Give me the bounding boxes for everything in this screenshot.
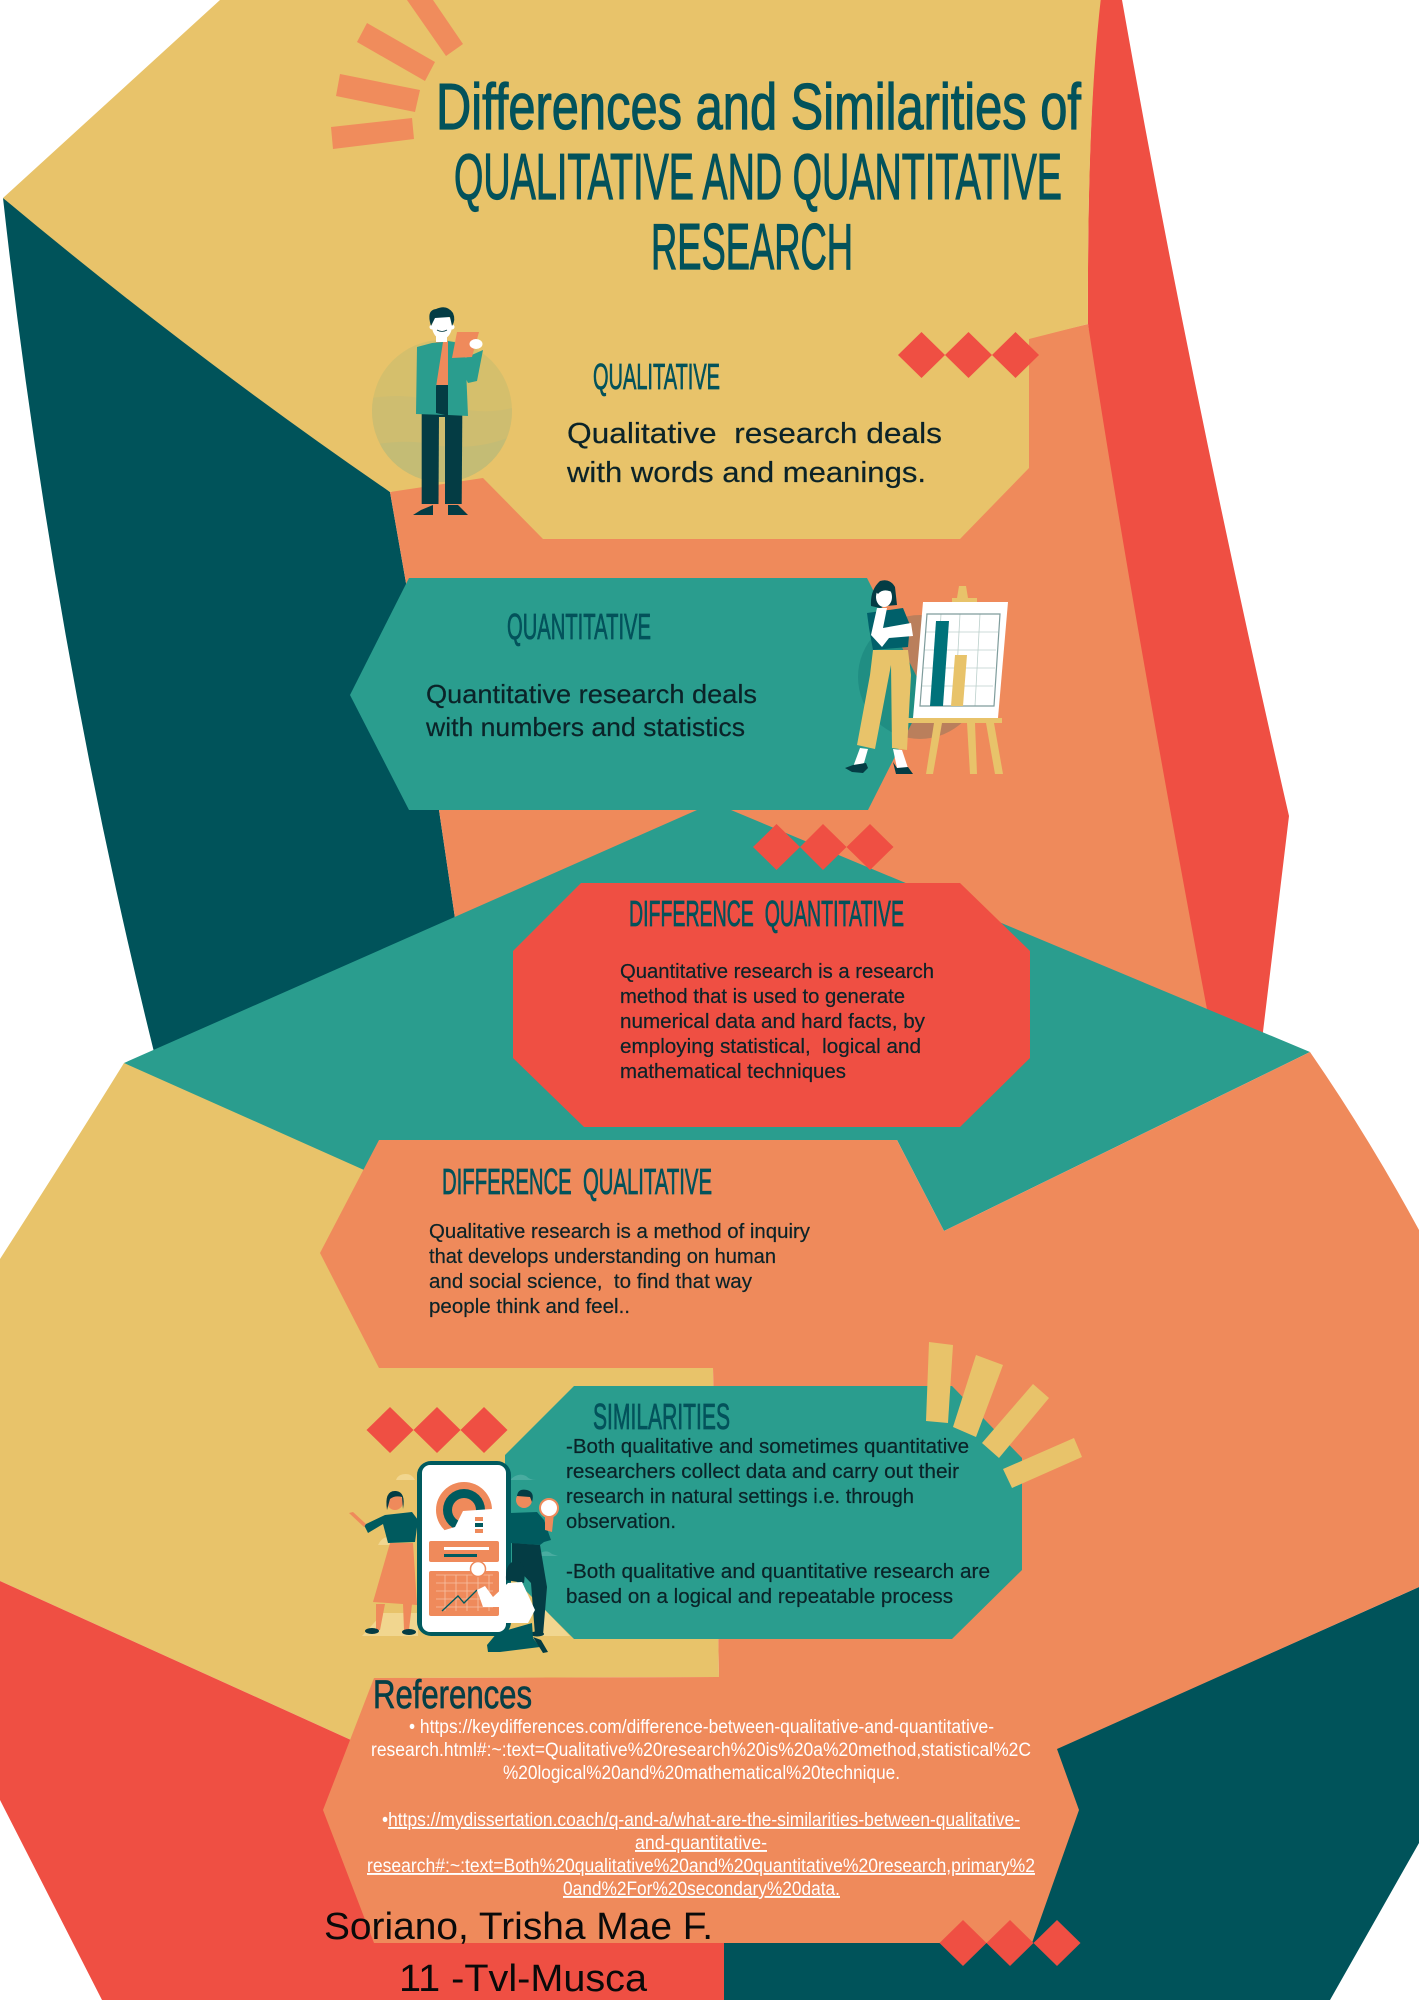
text: qualitative description: Qualitative research deals (567, 418, 942, 450)
text: difference qualitative description: Qualitative research is a method of inquiry (429, 1220, 811, 1243)
text: quantitative description: Quantitative research deals (426, 679, 757, 709)
text: reference list: research#:~:text=Both%20qualitative%20and%20quantitative%20research,primary%2 (367, 1856, 1035, 1877)
background shape: yellow lower left (0, 1063, 719, 1760)
decorative yellow rays by similarities (926, 1342, 1082, 1488)
text: difference qualitative description (429, 1220, 811, 1318)
text: similarities description: -Both qualitative and quantitative research are (566, 1561, 990, 1583)
background shape: dark teal left (3, 198, 456, 1052)
text: reference list: 0and%2For%20secondary%20data. (563, 1879, 840, 1900)
text: similarities description: research in natural settings i.e. through (566, 1486, 914, 1508)
text: similarities description: researchers collect data and carry out their (566, 1461, 959, 1483)
text: reference list: • https://keydifferences.com/difference-between-qualitative-and-quantitative- (409, 1717, 994, 1738)
diamonds: bottom right (940, 1920, 1080, 1966)
illustration: woman with bar chart on easel (845, 580, 1008, 774)
background shape: red bottom left (0, 1581, 724, 2000)
heading: qualitative: QUALITATIVE (593, 356, 720, 397)
title: Differences and Similarities of (436, 70, 1082, 143)
text: difference quantitative description: employing statistical, logical and (620, 1035, 921, 1058)
illustration: man reading tablet (372, 307, 512, 515)
panel: difference quantitative red octagon (513, 883, 1030, 1127)
text: similarities description: observation. (566, 1511, 676, 1533)
text: author name and class: Soriano, Trisha Mae F. (324, 1906, 713, 1948)
text: difference quantitative description: method that is used to generate (620, 985, 905, 1008)
background shape: large teal wedge (124, 810, 1310, 1231)
text: reference list: research.html#:~:text=Qualitative%20research%20is%20a%20method,statistical%2C (371, 1740, 1031, 1761)
heading: difference quantitative: DIFFERENCE QUANTITATIVE (629, 893, 904, 934)
background shape: red right (1088, 0, 1289, 1040)
text: similarities description (566, 1436, 990, 1608)
text: qualitative description (566, 418, 942, 489)
panel: similarities teal octagon (505, 1386, 1022, 1639)
text: similarities description: -Both qualitative and sometimes quantitative (566, 1436, 969, 1458)
illustration: people with phone dashboard (349, 1461, 570, 1653)
text: reference list: %20logical%20and%20mathematical%20technique. (503, 1763, 900, 1784)
diamonds: top right (898, 332, 1039, 378)
text: quantitative description: with numbers and statistics (425, 712, 745, 742)
text: difference quantitative description: numerical data and hard facts, by (620, 1010, 926, 1033)
text: qualitative description: with words and meanings. (566, 457, 926, 489)
text: author name and class (324, 1906, 713, 2000)
text: difference quantitative description: mathematical techniques (620, 1060, 846, 1083)
text: quantitative description (425, 679, 757, 742)
panel: qualitative, yellow top shape (3, 0, 1101, 539)
text: difference qualitative description: people think and feel.. (429, 1295, 630, 1318)
heading: similarities: SIMILARITIES (593, 1396, 730, 1437)
text: difference qualitative description: and social science, to find that way (429, 1270, 753, 1293)
heading: difference qualitative: DIFFERENCE QUALITATIVE (442, 1161, 712, 1202)
text: difference quantitative description (620, 960, 934, 1083)
diamonds: middle (753, 824, 894, 870)
text: reference list (367, 1717, 1035, 1900)
background shape: orange middle (390, 324, 1215, 1030)
text: author name and class: 11 -Tvl-Musca (399, 1958, 648, 2000)
title (436, 70, 1082, 283)
heading: references: References (373, 1673, 532, 1717)
text: difference quantitative description: Quantitative research is a research (620, 960, 934, 983)
panel: quantitative teal hexagon (350, 578, 926, 810)
heading: quantitative: QUANTITATIVE (507, 606, 651, 647)
background shape: dark teal bottom right (724, 1587, 1419, 2000)
decorative orange rays top left (331, 0, 463, 149)
diamonds: similarities (366, 1407, 508, 1453)
text: similarities description: based on a logical and repeatable process (566, 1586, 953, 1608)
text: difference qualitative description: that develops understanding on human (429, 1245, 776, 1268)
text: reference list: •https://mydissertation.coach/q-and-a/what-are-the-similarities-between-qualitative- (382, 1810, 1020, 1831)
text: reference list: and-quantitative- (635, 1833, 767, 1854)
title: RESEARCH (651, 210, 853, 283)
panel: difference qualitative, orange lower shape (320, 1052, 1419, 1943)
